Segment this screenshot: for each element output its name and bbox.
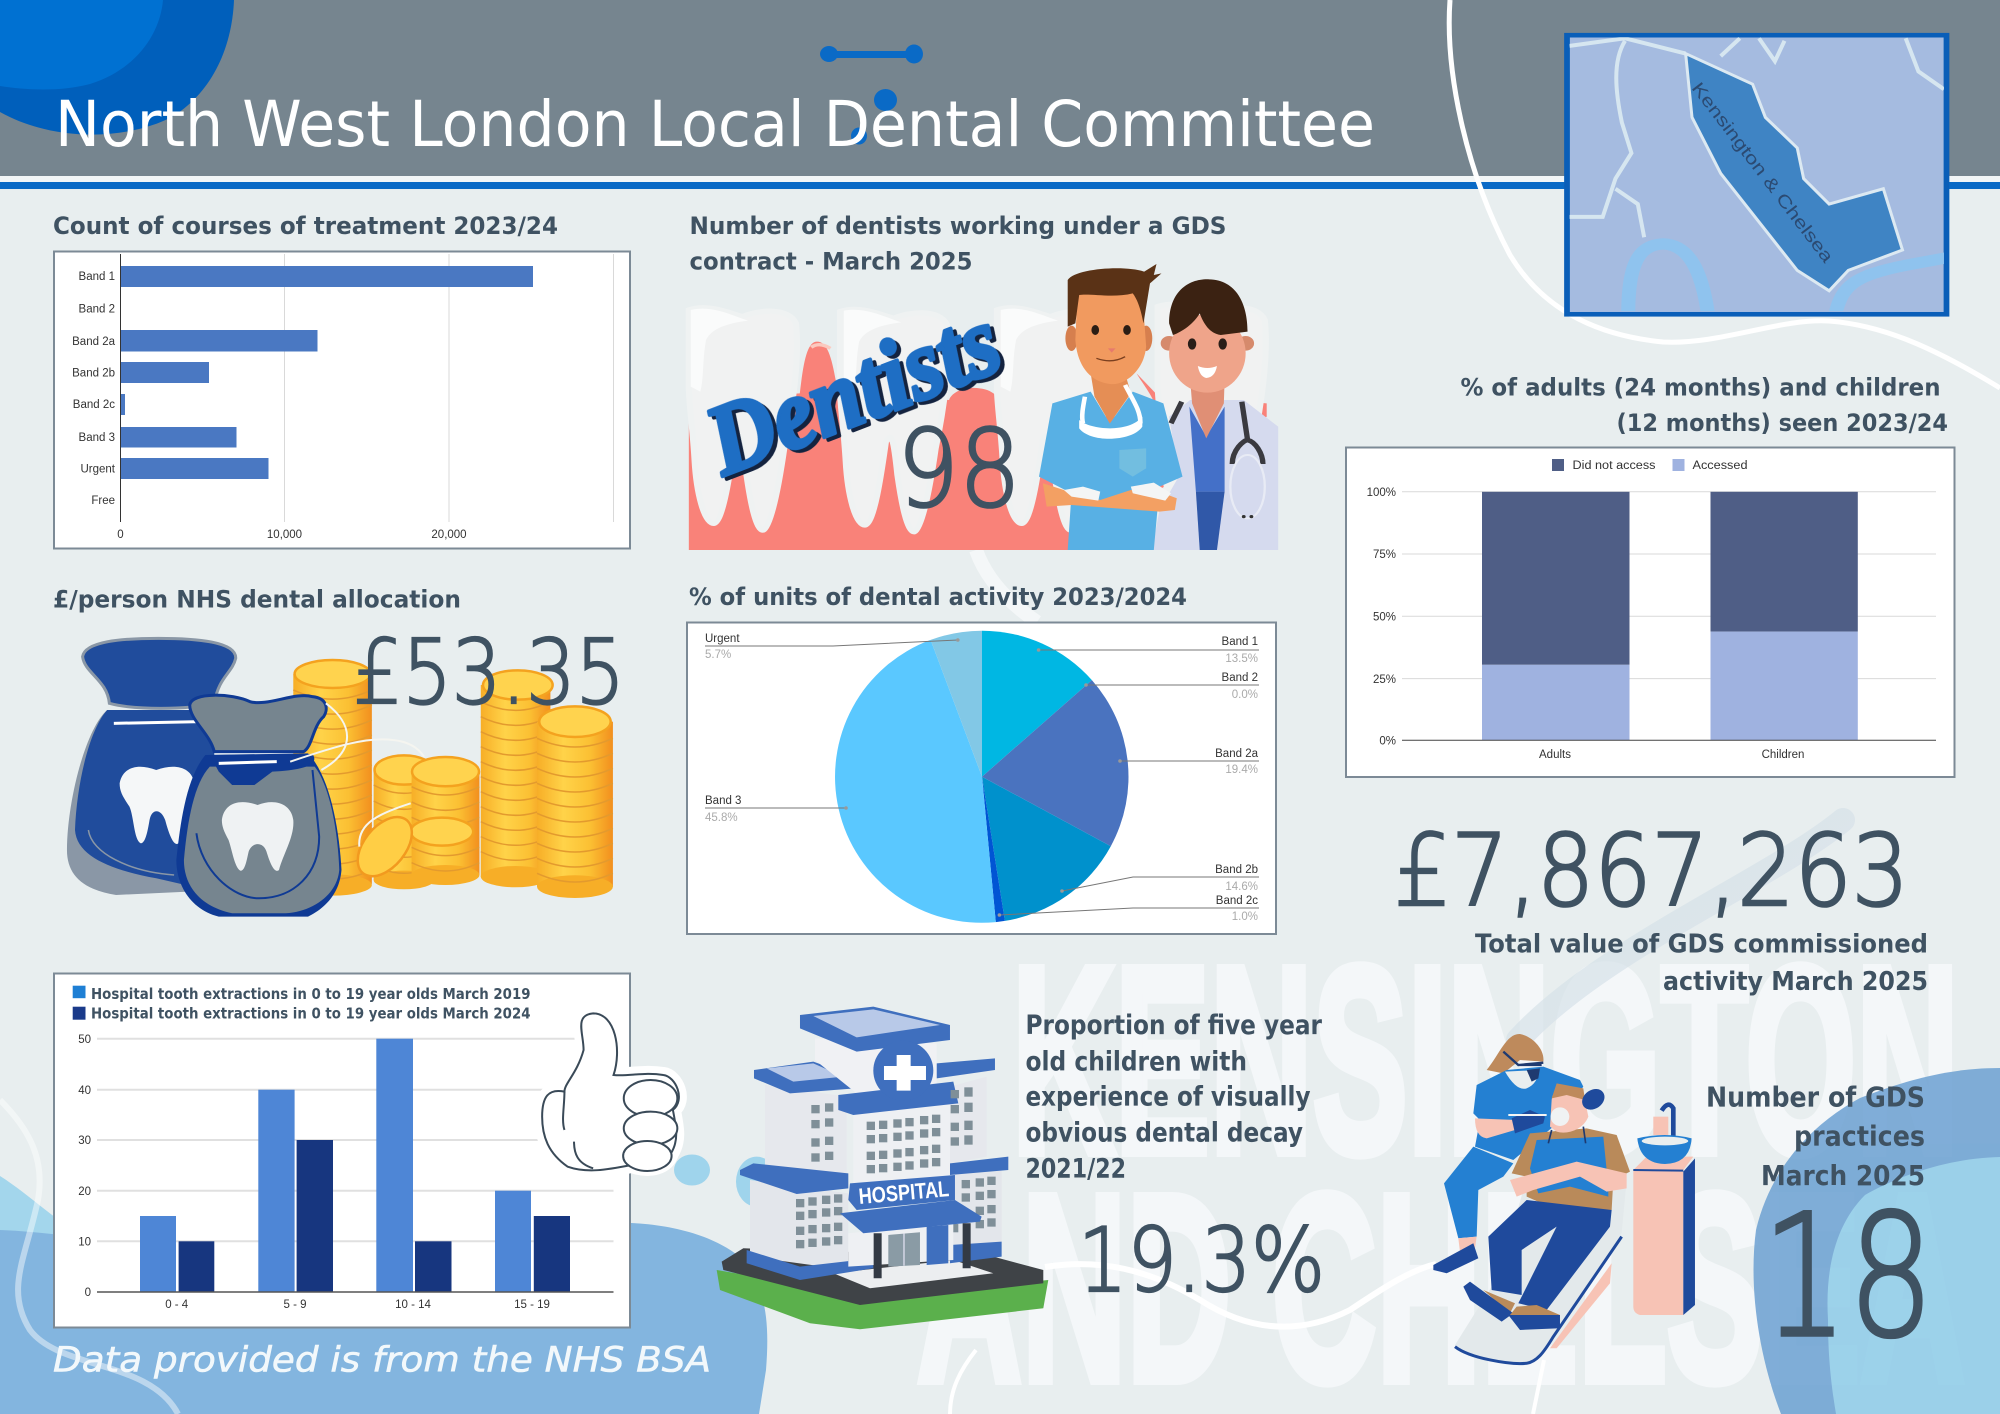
grouped bar chart: 0 xyxy=(85,1287,91,1299)
horizontal bar chart: Urgent xyxy=(80,464,116,476)
caption xyxy=(1706,1082,1925,1192)
grouped bar chart: 20 xyxy=(78,1186,91,1198)
grouped bar chart: 40 xyxy=(78,1085,91,1097)
blob beside thumb xyxy=(674,1154,710,1186)
pie chart: Band 2 xyxy=(1222,672,1258,684)
panel: per person allocation xyxy=(53,586,625,917)
stacked bar chart: Adults xyxy=(1539,749,1571,761)
header icon: dumbbell and dots xyxy=(820,44,923,144)
horizontal bar chart: Band 2c xyxy=(73,399,115,411)
stat: 18 practices: 18 xyxy=(1762,1178,1934,1375)
horizontal bar chart: Band 3 xyxy=(79,432,115,444)
horizontal bar chart xyxy=(72,254,614,541)
caption: March 2025 xyxy=(1761,1160,1925,1192)
panel: hospital tooth extractions xyxy=(54,974,710,1328)
illustration: male dentist xyxy=(1039,264,1183,550)
stacked bar chart: 50% xyxy=(1373,612,1396,624)
horizontal bar chart: Band 2b xyxy=(72,368,115,380)
pie chart: Band 2a xyxy=(1215,748,1259,760)
legend xyxy=(73,985,530,1022)
panel: units of dental activity xyxy=(687,583,1276,934)
header blob xyxy=(0,0,234,135)
pie chart: 13.5% xyxy=(1225,653,1258,665)
caption: practices xyxy=(1794,1120,1925,1152)
panel: adults and children seen xyxy=(1346,374,1954,777)
header band xyxy=(0,0,2000,189)
panel: number of dentists xyxy=(689,212,1278,550)
caption: obvious dental decay xyxy=(1026,1118,1303,1148)
illustration: dentist treating patient xyxy=(1433,1034,1695,1364)
grouped bar chart xyxy=(78,1034,614,1311)
icon: faint toothbrush xyxy=(1518,820,1843,1040)
map: Kensington and Chelsea xyxy=(1567,35,1947,314)
heading: £/person NHS dental allocation xyxy=(53,586,461,614)
caption: old children with xyxy=(1026,1046,1247,1078)
stacked bar chart: 100% xyxy=(1367,487,1396,499)
grouped bar chart: 50 xyxy=(78,1034,91,1046)
panel: visually obvious decay xyxy=(717,1007,1325,1329)
stacked bar chart: Did not access xyxy=(1572,460,1656,472)
illustration: hospital: HOSPITAL xyxy=(858,1176,950,1209)
illustration: teeth and gums xyxy=(689,304,1267,550)
stat: 53.35 pounds: £53.35 xyxy=(353,620,625,724)
caption: experience of visually xyxy=(1026,1082,1310,1112)
grouped bar chart: 15 - 19 xyxy=(514,1299,550,1311)
pie chart: 14.6% xyxy=(1225,881,1258,893)
chart frame xyxy=(1346,448,1954,777)
heading: Number of dentists working under a GDS xyxy=(690,212,1226,240)
horizontal bar chart: 10,000 xyxy=(267,529,302,541)
caption: 2021/22 xyxy=(1026,1154,1126,1184)
horizontal bar chart: 20,000 xyxy=(431,529,467,541)
illustration: gold coins xyxy=(293,660,613,898)
legend: Hospital tooth extractions in 0 to 19 year olds March 2019 xyxy=(91,985,530,1003)
stat: 98: 98 xyxy=(897,408,1021,532)
background blob: bottom right xyxy=(1754,1068,2000,1414)
grouped bar chart: 30 xyxy=(78,1135,91,1147)
grouped bar chart: 5 - 9 xyxy=(283,1299,307,1311)
stat: total value: £7,867,263 xyxy=(1394,814,1909,929)
horizontal bar chart: Free xyxy=(91,495,115,507)
legend: Hospital tooth extractions in 0 to 19 year olds March 2024 xyxy=(91,1004,530,1022)
caption line two: activity March 2025 xyxy=(1663,967,1928,997)
horizontal bar chart: 0 xyxy=(117,529,124,541)
grouped bar chart: 10 xyxy=(78,1236,91,1248)
stat: 19.3 percent: 19.3% xyxy=(1078,1209,1325,1312)
illustration: hospital xyxy=(717,1007,1048,1329)
chart frame xyxy=(54,252,630,548)
pie chart xyxy=(705,631,1259,923)
heading line two: (12 months) seen 2023/24 xyxy=(1616,409,1948,437)
pie chart: 19.4% xyxy=(1225,764,1258,776)
horizontal bar chart: Band 1 xyxy=(79,271,115,283)
watermark: KENSINGTON AND CHELSEA xyxy=(917,912,1965,1414)
text art: Dentists: Dentists xyxy=(690,284,1015,497)
background blob: bottom left xyxy=(0,1176,767,1414)
pie chart: Band 2b xyxy=(1215,864,1258,876)
pie chart: 5.7% xyxy=(705,649,731,661)
pie chart: Urgent xyxy=(705,633,740,645)
map label: Kensington & Chelsea xyxy=(1688,78,1838,266)
pie chart: Band 3 xyxy=(705,795,741,807)
horizontal bar chart: Band 2a xyxy=(72,336,116,348)
pie chart: 0.0% xyxy=(1232,689,1258,701)
panel: GDS practices xyxy=(1433,1034,1934,1375)
horizontal bar chart: Band 2 xyxy=(79,304,115,316)
stacked bar chart: Accessed xyxy=(1692,460,1748,472)
stacked bar chart: 25% xyxy=(1373,674,1396,686)
chart frame xyxy=(54,974,630,1328)
caption line one: Total value of GDS commissioned xyxy=(1475,930,1928,960)
stacked bar chart: Children xyxy=(1762,749,1804,761)
heading: % of units of dental activity 2023/2024 xyxy=(689,583,1187,611)
footer note: Data provided is from the NHS BSA xyxy=(53,1340,711,1380)
grouped bar chart: 0 - 4 xyxy=(165,1299,189,1311)
pie chart: Band 2c xyxy=(1216,895,1258,907)
caption xyxy=(1026,1010,1322,1184)
heading: Count of courses of treatment 2023/24 xyxy=(53,212,558,240)
stacked bar chart: 0% xyxy=(1379,736,1396,748)
heading line two: contract - March 2025 xyxy=(690,248,972,276)
caption: Proportion of five year xyxy=(1026,1010,1322,1041)
panel: total value xyxy=(1394,814,1928,997)
pie chart: 45.8% xyxy=(705,812,738,824)
icon: thumbs up xyxy=(542,1013,679,1171)
title: North West London Local Dental Committee xyxy=(55,88,1375,161)
pie chart: Band 1 xyxy=(1222,636,1258,648)
chart frame xyxy=(687,622,1276,934)
caption: Number of GDS xyxy=(1706,1082,1925,1114)
heading: % of adults (24 months) and children xyxy=(1460,374,1940,402)
grouped bar chart: 10 - 14 xyxy=(395,1299,432,1311)
illustration: dental floss boxes xyxy=(67,638,424,917)
stacked bar chart xyxy=(1367,459,1936,761)
illustration: female dentist xyxy=(1152,279,1278,550)
pie chart: 1.0% xyxy=(1232,911,1258,923)
panel: courses of treatment xyxy=(53,212,630,548)
stacked bar chart: 75% xyxy=(1373,549,1396,561)
